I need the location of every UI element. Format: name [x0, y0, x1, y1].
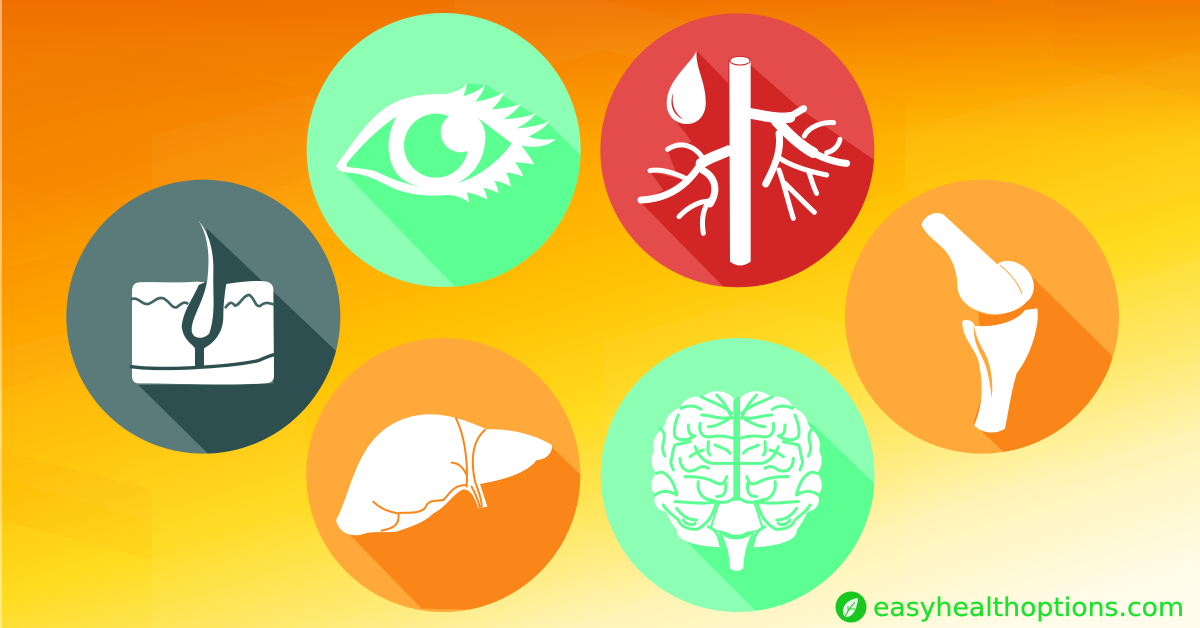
icon circle: liver	[306, 338, 581, 612]
icon: green leaf badge	[836, 592, 866, 622]
icon circle: skin and hair follicle	[66, 180, 340, 454]
logo: easyhealthoptions.com	[836, 592, 1184, 623]
icon: brain	[651, 391, 822, 571]
icon circle: blood vessels	[600, 13, 874, 287]
icon: eye	[336, 83, 556, 202]
icon: skin block with hair follicle	[131, 221, 275, 385]
icon circle: eye	[307, 13, 581, 287]
icon: knee bones	[922, 213, 1038, 432]
icon: blood vessel and drop	[641, 51, 847, 265]
icon: liver	[336, 414, 552, 535]
icon circle: brain	[601, 338, 875, 612]
icon circle: knee joint	[845, 180, 1119, 454]
website address text: easyhealthoptions.com	[873, 593, 1184, 623]
